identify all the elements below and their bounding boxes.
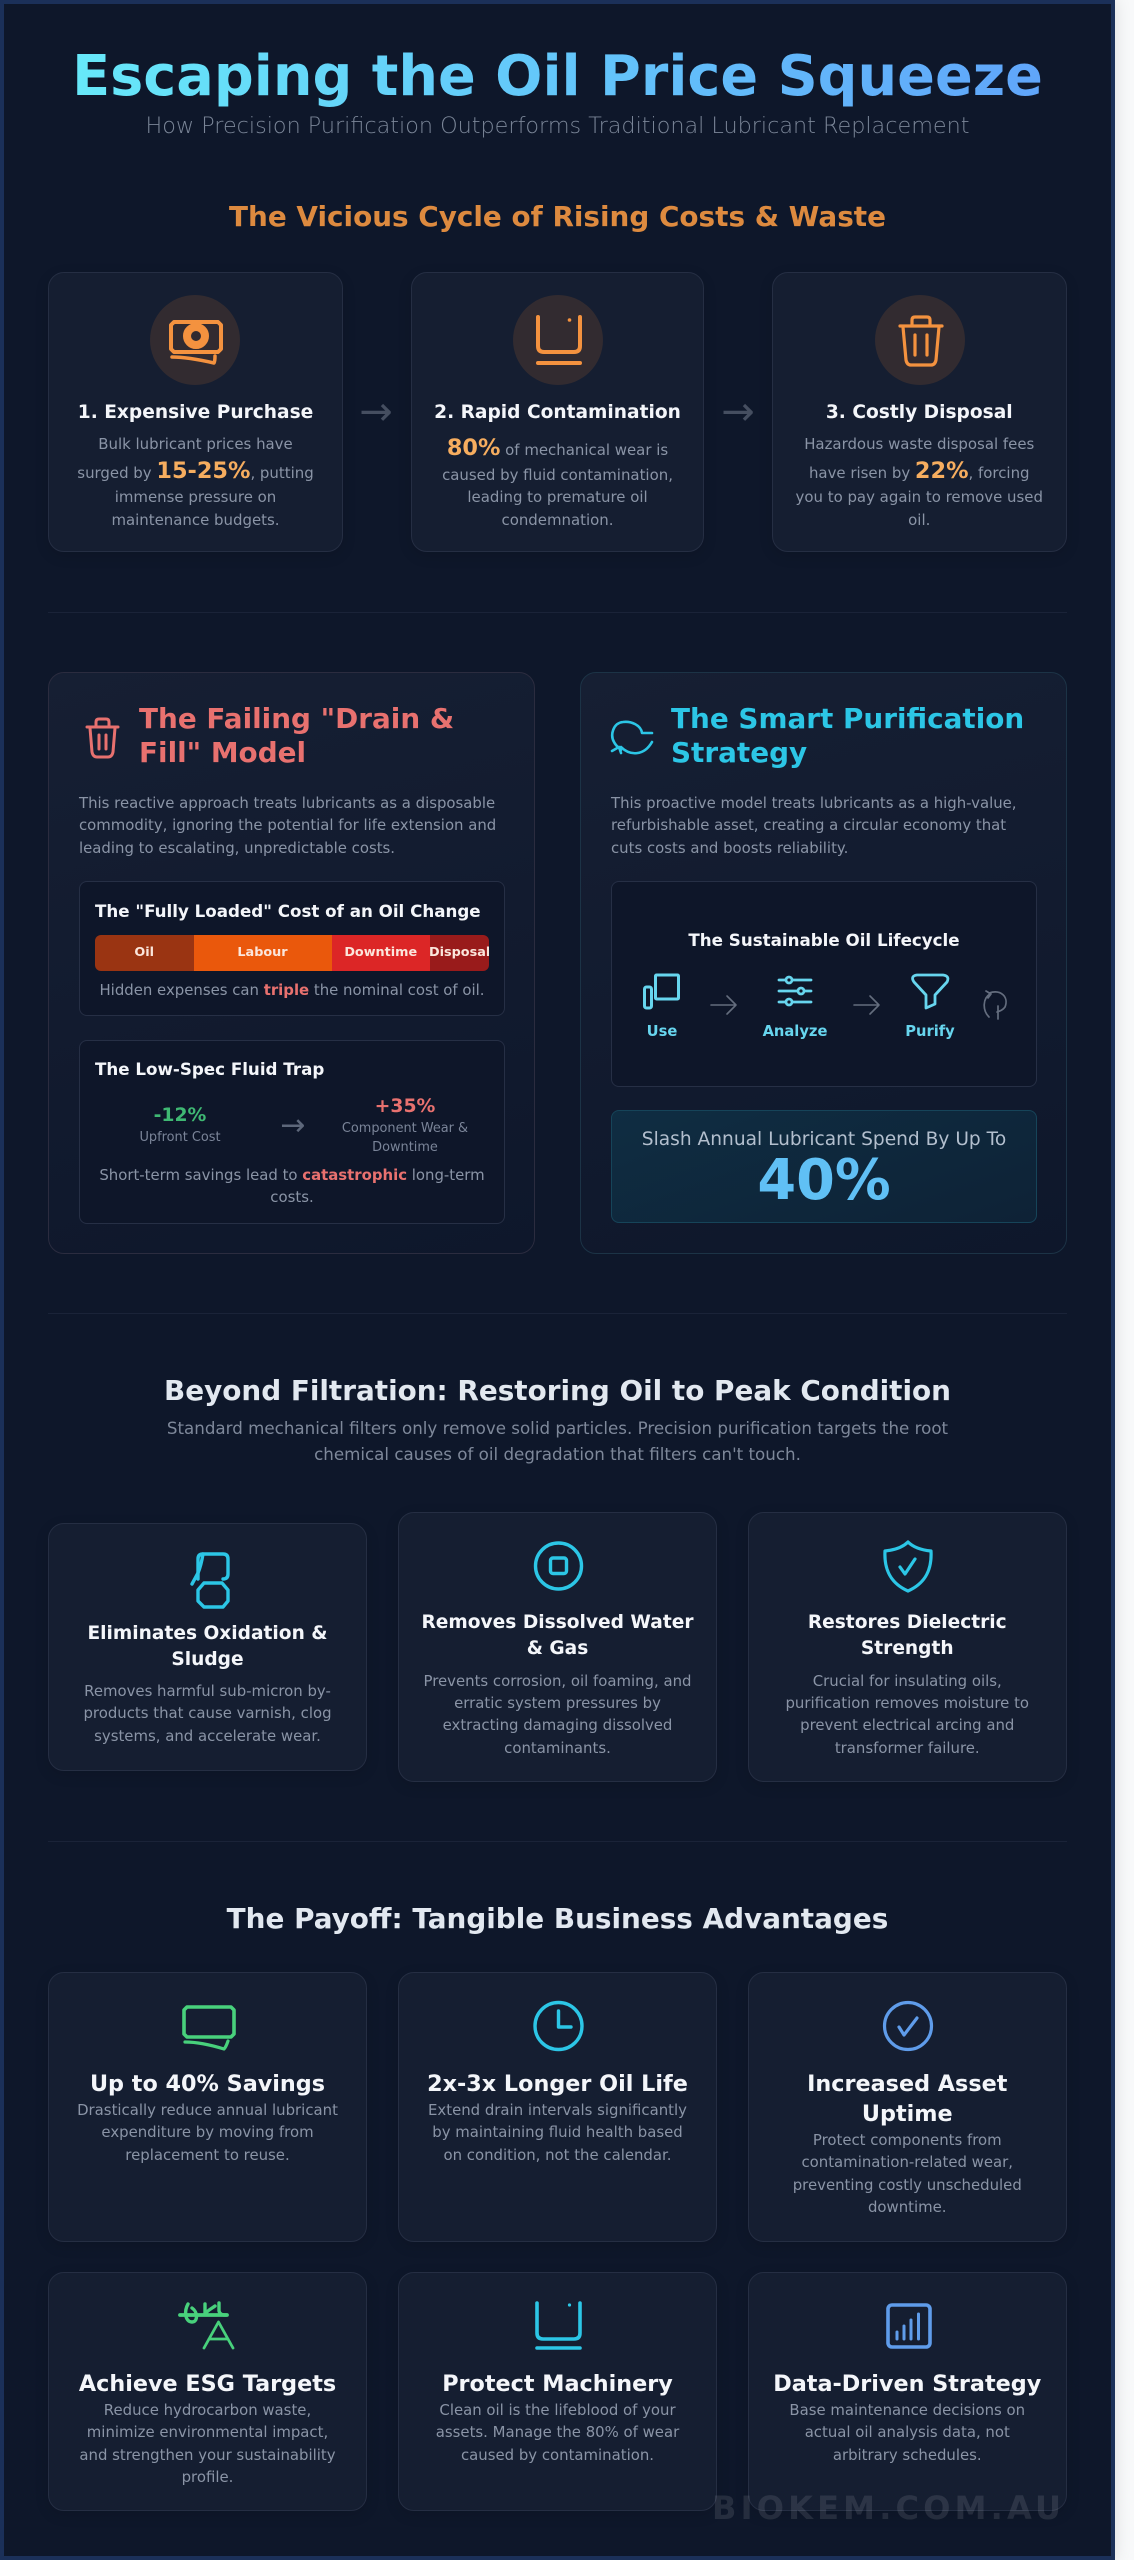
icon: beaker: [536, 315, 582, 365]
label: Downtime: [372, 1140, 438, 1154]
subtitle: How Precision Purification Outperforms Traditional Lubricant Replacement: [145, 113, 970, 139]
card text: Reduce hydrocarbon waste,: [104, 2401, 311, 2419]
stacked cost bar: [95, 935, 489, 971]
card text: downtime.: [868, 2198, 947, 2216]
card: longer oil life: [398, 1972, 717, 2242]
icon: trash: [86, 718, 120, 758]
icon circle: beaker: [512, 295, 602, 385]
card text: contamination-related wear,: [801, 2153, 1013, 2171]
card title: [749, 2069, 1066, 2129]
card: dielectric strength: [748, 1512, 1066, 1782]
panel heading: The Smart Purification: [671, 702, 1024, 735]
caption: Hidden expenses can triple the nominal cost of oil.: [99, 981, 485, 999]
heading: vicious cycle: The Vicious Cycle of Rising Costs & Waste: [229, 200, 886, 233]
arrow: [853, 995, 880, 1015]
card text: [442, 435, 673, 528]
card text: condemnation.: [501, 510, 614, 528]
card text: erratic system pressures by: [454, 1694, 661, 1712]
segment: downtime: [332, 935, 430, 971]
panel description: leading to escalating, unpredictable costs.: [79, 839, 395, 857]
card: rapid contamination: [411, 272, 704, 552]
title: Escaping the Oil Price Squeeze: [72, 44, 1043, 109]
card text: [83, 1682, 332, 1745]
arrow: →: [359, 389, 393, 435]
card: ESG: [48, 2272, 367, 2511]
card text: Extend drain intervals significantly: [428, 2101, 687, 2119]
panel description: cuts costs and boosts reliability.: [611, 839, 848, 857]
icon: language ESG: [175, 2299, 239, 2355]
card text: minimize environmental impact,: [87, 2423, 328, 2441]
card text: [77, 2101, 338, 2164]
card text: you to pay again to remove used: [796, 488, 1043, 506]
card text: preventing costly unscheduled: [793, 2176, 1022, 2194]
panel: failing drain and fill: [48, 672, 535, 1254]
card title: Increased Asset: [807, 2071, 1007, 2097]
card text: replacement to reuse.: [125, 2146, 290, 2164]
icon circle: trash: [875, 295, 965, 385]
panel description: This reactive approach treats lubricants as a disposable: [79, 794, 495, 812]
card text: Protect components from: [813, 2131, 1002, 2149]
label: Upfront Cost: [139, 1130, 221, 1145]
card text: Crucial for insulating oils,: [813, 1672, 1002, 1690]
card text: [749, 2399, 1066, 2466]
card: savings: [48, 1972, 367, 2242]
panel description: commodity, ignoring the potential for life extension and: [79, 816, 496, 834]
card title: Data-Driven Strategy: [773, 2371, 1041, 2397]
card: data-driven: [748, 2272, 1066, 2511]
watermark: BIOKEM.COM.AU: [712, 2489, 1065, 2527]
card title: 2x-3x Longer Oil Life: [427, 2071, 688, 2097]
card text: expenditure by moving from: [101, 2123, 314, 2141]
card title: Sludge: [171, 1649, 244, 1670]
card title: [808, 1612, 1007, 1659]
box: low-spec fluid trap: [79, 1040, 505, 1224]
card text: purification removes moisture to: [785, 1694, 1029, 1712]
card text: Base maintenance decisions on: [789, 2401, 1025, 2419]
segment: labour: [194, 935, 332, 971]
card text: [749, 2129, 1066, 2219]
card text: Removes harmful sub-micron by-: [84, 1682, 331, 1700]
card text: [424, 1672, 692, 1757]
card text: leading to premature oil: [467, 488, 648, 506]
card title: [421, 1612, 694, 1659]
panel description: [78, 794, 496, 857]
card: asset uptime: [748, 1972, 1066, 2242]
card text: maintenance budgets.: [111, 510, 280, 528]
card title: 1. Expensive Purchase: [78, 402, 313, 423]
card text: Drastically reduce annual lubricant: [77, 2101, 338, 2119]
panel heading: [139, 702, 454, 769]
card text: Hazardous waste disposal fees: [804, 435, 1034, 453]
card: dissolved water and gas: [398, 1512, 717, 1782]
card title: 3. Costly Disposal: [826, 402, 1013, 423]
stat: component wear: [342, 1096, 468, 1154]
segment: downtime: Downtime: [344, 945, 417, 960]
panel description: [610, 794, 1017, 857]
panel heading: The Failing "Drain &: [139, 702, 454, 735]
card text: Clean oil is the lifeblood of your: [439, 2401, 676, 2419]
card text: extracting damaging dissolved: [443, 1716, 672, 1734]
card text: caused by contamination.: [461, 2446, 654, 2464]
segment: labour: Labour: [237, 945, 288, 960]
icon: clock: [533, 2000, 584, 2052]
heading: payoff: The Payoff: Tangible Business Advantages: [227, 1902, 888, 1935]
card text: surged by 15-25%, putting: [77, 458, 314, 484]
icon: recycle: [983, 990, 1007, 1020]
card text: [796, 435, 1043, 528]
heading: beyond filtration: Beyond Filtration: Restoring Oil to Peak Condition: [164, 1374, 951, 1407]
card text: on condition, not the calendar.: [444, 2146, 672, 2164]
label: analyze: Analyze: [763, 1023, 827, 1040]
card text: products that cause varnish, clog: [83, 1704, 332, 1722]
icon: use: [643, 974, 680, 1010]
section intro: [167, 1418, 948, 1464]
card text: by maintaining fluid health based: [432, 2123, 683, 2141]
card: oxidation and sludge: [48, 1523, 367, 1771]
card text: Prevents corrosion, oil foaming, and: [424, 1672, 692, 1690]
icon: beaker: [528, 2295, 588, 2355]
card text: prevent electrical arcing and: [800, 1716, 1014, 1734]
card text: [77, 435, 314, 528]
box title: The Sustainable Oil Lifecycle: [688, 930, 960, 950]
segment: oil: Oil: [134, 945, 154, 960]
icon: money outline: [182, 2005, 236, 2051]
icon: money: [169, 320, 223, 365]
card text: Bulk lubricant prices have: [98, 435, 293, 453]
card text: [428, 2101, 687, 2164]
card text: and strengthen your sustainability: [79, 2446, 336, 2464]
callout text: Slash Annual Lubricant Spend By Up To: [642, 1129, 1006, 1150]
box title: The "Fully Loaded" Cost of an Oil Change: [95, 901, 481, 921]
card title: & Gas: [527, 1638, 588, 1659]
segment: disposal: [430, 935, 489, 971]
card text: actual oil analysis data, not: [805, 2423, 1010, 2441]
caption: [99, 1166, 485, 1206]
caption: costs.: [270, 1188, 314, 1206]
card text: [49, 2399, 366, 2489]
card: costly disposal: [772, 272, 1066, 552]
card title: Up to 40% Savings: [90, 2071, 325, 2097]
caption: Short-term savings lead to catastrophic long-term: [99, 1166, 485, 1184]
value: -12%: [154, 1105, 206, 1126]
card title: Restores Dielectric: [808, 1612, 1007, 1633]
icon: oxidation: [190, 1552, 230, 1609]
icon: bar chart: [879, 2297, 937, 2355]
section intro: chemical causes of oil degradation that filters can't touch.: [314, 1444, 801, 1464]
arrow: →: [280, 1108, 306, 1143]
card text: assets. Manage the 80% of wear: [436, 2423, 679, 2441]
panel heading: Fill" Model: [139, 736, 306, 769]
card text: [399, 2399, 716, 2466]
card title: Achieve ESG Targets: [79, 2371, 336, 2397]
box: fully loaded cost: [79, 881, 505, 1016]
icon: check circle: [882, 2000, 934, 2052]
card title: 2. Rapid Contamination: [434, 402, 681, 423]
card title: Eliminates Oxidation &: [87, 1623, 328, 1644]
card title: Protect Machinery: [442, 2371, 673, 2397]
panel description: refurbishable asset, creating a circular economy that: [611, 816, 1006, 834]
label: purify: Purify: [905, 1023, 955, 1040]
icon: purify: [911, 974, 950, 1010]
card text: contaminants.: [504, 1739, 611, 1757]
icon: target circle: [534, 1541, 584, 1591]
card text: [785, 1672, 1029, 1757]
card text: arbitrary schedules.: [833, 2446, 982, 2464]
card title: Removes Dissolved Water: [421, 1612, 694, 1633]
box title: The Low-Spec Fluid Trap: [95, 1059, 324, 1079]
label: [342, 1121, 468, 1154]
icon: trash: [898, 315, 944, 367]
box: sustainable lifecycle: [611, 881, 1037, 1087]
card text: transformer failure.: [835, 1739, 980, 1757]
card title: Uptime: [862, 2101, 953, 2127]
card: protect machinery: [398, 2272, 717, 2511]
arrow: [710, 995, 737, 1015]
panel heading: [671, 702, 1024, 769]
card text: caused by fluid contamination,: [442, 466, 673, 484]
arrow: →: [721, 389, 755, 435]
card text: oil.: [908, 510, 930, 528]
icon: analyze: [778, 976, 812, 1006]
stat: upfront cost: [139, 1105, 221, 1145]
icon: shield: [883, 1540, 933, 1593]
card text: have risen by 22%, forcing: [809, 458, 1030, 484]
icon: swirl: [610, 720, 654, 754]
card: expensive purchase: [48, 272, 343, 552]
icon circle: money: [150, 295, 240, 385]
card text: systems, and accelerate wear.: [94, 1727, 321, 1745]
card title: [87, 1623, 328, 1670]
callout: 40 percent: [611, 1110, 1037, 1223]
panel: smart purification: [580, 672, 1067, 1254]
panel description: This proactive model treats lubricants as a high-value,: [611, 794, 1017, 812]
card text: 80% of mechanical wear is: [447, 435, 668, 461]
segment: oil: [95, 935, 194, 971]
card text: profile.: [182, 2468, 233, 2486]
label: use: Use: [647, 1023, 677, 1040]
panel heading: Strategy: [671, 736, 807, 769]
section intro: Standard mechanical filters only remove solid particles. Precision purification targets the root: [167, 1418, 948, 1438]
label: Component Wear &: [342, 1121, 468, 1136]
card title: Strength: [861, 1638, 954, 1659]
callout number: 40%: [757, 1148, 891, 1213]
value: +35%: [375, 1096, 435, 1117]
card text: immense pressure on: [115, 488, 276, 506]
